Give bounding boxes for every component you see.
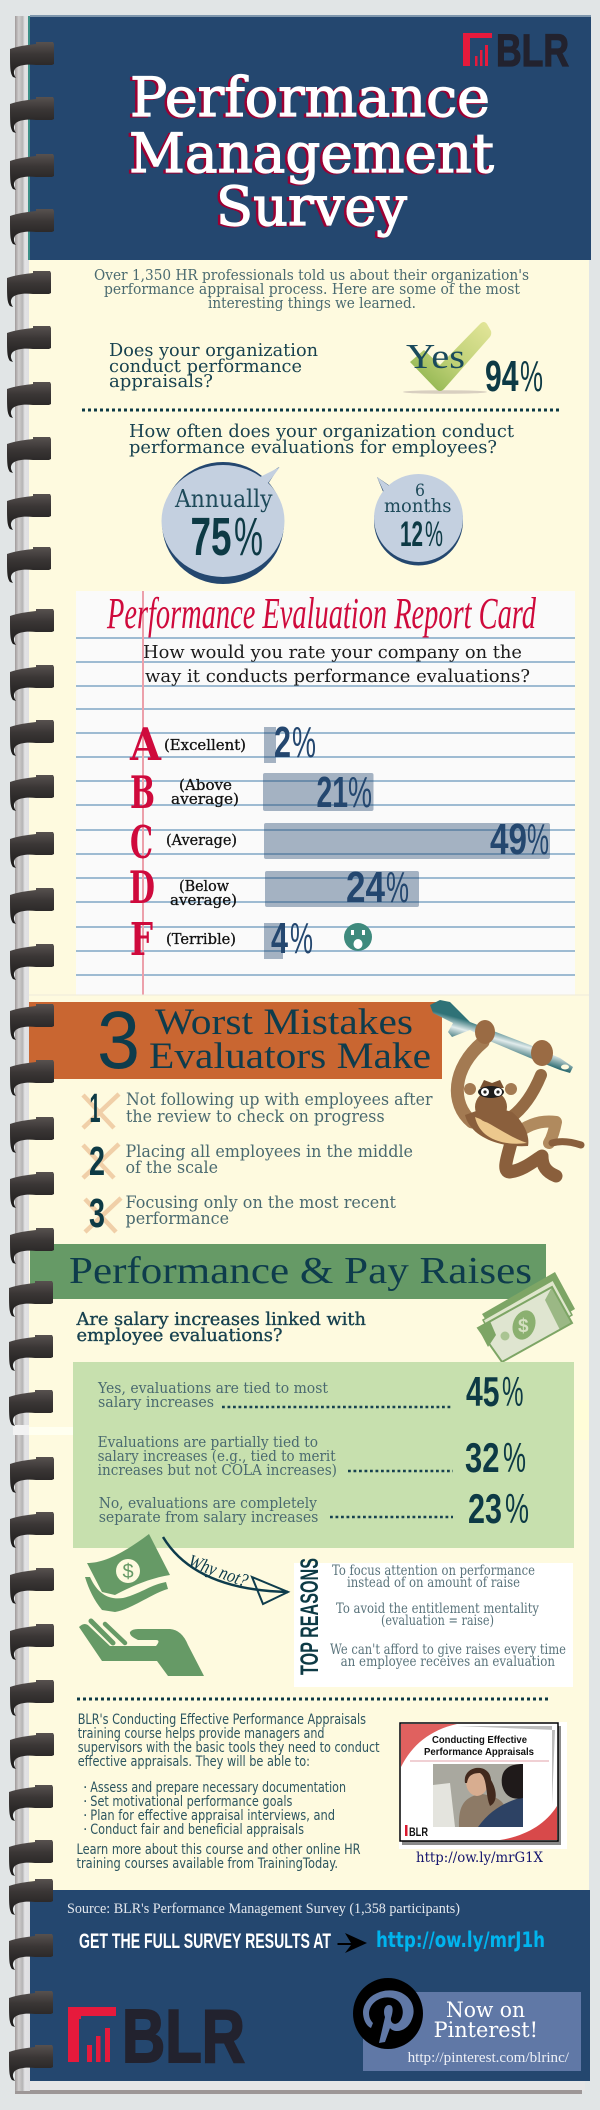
result: 45%: salary increases (98, 1393, 214, 1411)
source: Source: BLR's Performance Management Survey (1,358 participants) (67, 1901, 460, 1917)
speech bubble: 6 months 12%: 6 (415, 481, 425, 501)
banner: 3 worst mistakes: 3 (97, 995, 140, 1086)
answer: yes 94%: Yes (406, 337, 465, 376)
training course text: · (83, 1808, 87, 1824)
intro text: performance appraisal process. Here are some of the most (104, 280, 520, 298)
mistake list (83, 1085, 433, 1236)
dotted divider (82, 408, 559, 412)
card question (143, 642, 530, 687)
training course text: BLR's Conducting Effective Performance Appraisals (78, 1712, 366, 1728)
mistake 3: performance (126, 1209, 229, 1229)
mistake 1: Not following up with employees after (126, 1090, 433, 1110)
grade letters: D (129, 861, 155, 914)
card question: How would you rate your company on the (143, 642, 522, 663)
grade percentages: % (290, 914, 313, 963)
panel: report card (76, 589, 575, 995)
training course text: Conduct fair and beneficial appraisals (90, 1822, 304, 1838)
banner: performance and pay raises: Performance & Pay Raises (69, 1250, 532, 1292)
icon: money over hand (79, 1534, 204, 1676)
survey url: http://ow.ly/mrJ1h (376, 1928, 545, 1952)
training course text: effective appraisals. They will be able to: (78, 1754, 310, 1770)
pinterest badge: http://pinterest.com/blrinc/ (408, 2050, 570, 2066)
icon: check mark (403, 322, 491, 394)
question: how often: How often does your organization conduct (129, 421, 515, 442)
title: Management (129, 122, 494, 185)
question: conduct appraisals: conduct performance (109, 356, 302, 377)
title: Survey (216, 175, 407, 238)
result: 23%: % (505, 1485, 529, 1532)
grade percentages: 4 (271, 914, 288, 963)
question: conduct appraisals: appraisals? (109, 371, 213, 392)
arrow (338, 1933, 367, 1953)
grade labels: (Above (179, 778, 232, 794)
arrow: why not: Why not? (185, 1551, 251, 1592)
result: 23%: No, evaluations are completely (99, 1494, 317, 1512)
result: 32%: Evaluations are partially tied to (98, 1433, 318, 1451)
grade percentages: % (292, 718, 316, 767)
question: salary increases: employee evaluations? (76, 1325, 282, 1346)
grade percentages: % (348, 768, 372, 817)
answer: yes 94% (406, 337, 543, 401)
icon: shocked face (344, 923, 372, 951)
question: conduct appraisals: Does your organization (109, 340, 318, 361)
result: 23%: 23 (468, 1485, 502, 1532)
result: 32%: 32 (465, 1434, 500, 1481)
result: 32%: increases but not COLA increases) (98, 1461, 337, 1479)
training course text: Learn more about this course and other online HR (76, 1842, 361, 1858)
question: conduct appraisals (109, 340, 318, 392)
intro text: interesting things we learned. (208, 294, 416, 312)
pinterest badge: Now on (446, 1998, 525, 2022)
page fold glitch (29, 1400, 589, 1440)
call to action: GET THE FULL SURVEY RESULTS AT (79, 1930, 331, 1953)
icon: money over hand: $ (122, 1561, 134, 1583)
grade labels: (Excellent) (164, 738, 246, 754)
illustration: monkey with wrench (430, 1000, 581, 1176)
logo: BLR bottom (68, 1994, 245, 2078)
mistake 1 (83, 1085, 433, 1131)
intro text (94, 266, 529, 312)
reasons: We can't afford to give raises every time (330, 1642, 566, 1658)
mistake 2 (83, 1138, 413, 1184)
grade labels (164, 738, 246, 948)
icon: stack of dollar bills: $ (518, 1316, 529, 1337)
training course text: supervisors with the basic tools they need to conduct (78, 1740, 380, 1756)
grade labels: (Below (179, 879, 230, 895)
divider (29, 994, 589, 996)
training course text: Plan for effective appraisal interviews, and (90, 1808, 335, 1824)
reasons: To focus attention on performance (332, 1563, 535, 1579)
result: 45%: Yes, evaluations are tied to most (97, 1379, 328, 1397)
speech bubble: annually 75%: % (234, 507, 263, 567)
mistake 2: Placing all employees in the middle (126, 1142, 413, 1162)
reasons: instead of on amount of raise (347, 1575, 520, 1591)
title: Management (126, 123, 492, 186)
logo: BLR top: BLR (496, 25, 569, 76)
grade letters (129, 718, 162, 966)
banner: performance and pay raises (30, 1244, 546, 1299)
grade percentages: % (386, 863, 409, 912)
training course text: Set motivational performance goals (90, 1794, 292, 1810)
grade letters: F (130, 913, 153, 966)
grade percentages: 21 (316, 768, 348, 817)
grade letters: A (129, 718, 162, 771)
speech bubble: annually 75%: 75 (190, 507, 232, 567)
course thumbnail: BLR (409, 1825, 428, 1839)
mistake 3: Focusing only on the most recent (126, 1193, 396, 1213)
speech bubble: annually 75% (162, 462, 284, 584)
reasons: (evaluation = raise) (381, 1613, 494, 1629)
title: Performance (128, 67, 488, 130)
grade percentages: % (527, 815, 549, 864)
speech bubble: 6 months 12% (374, 474, 463, 566)
grade labels: average) (170, 893, 237, 909)
training course text: · (83, 1780, 87, 1796)
course thumbnail: Performance Appraisals (424, 1746, 534, 1758)
question: salary increases: Are salary increases linked with (76, 1309, 366, 1330)
course thumbnail: Conducting Effective (432, 1734, 527, 1746)
banner: 3 worst mistakes: Worst Mistakes (155, 1002, 413, 1043)
logo: BLR bottom: BLR (122, 1994, 245, 2078)
grade labels: (Terrible) (166, 932, 236, 948)
mistake 2: 2 (89, 1138, 105, 1184)
result: 45%: 45 (466, 1368, 500, 1415)
result: 32%: salary increases (e.g., tied to merit (98, 1447, 336, 1465)
dotted divider (77, 1698, 548, 1700)
panel: salary link results (73, 1362, 574, 1548)
speech bubble: 6 months 12%: % (425, 515, 443, 554)
result: 32%: % (503, 1434, 526, 1481)
banner: 3 worst mistakes (29, 995, 442, 1086)
mistake 1: the review to check on progress (126, 1107, 385, 1127)
photo (433, 1764, 523, 1827)
mistake 1: 1 (90, 1085, 100, 1131)
training course text (76, 1712, 380, 1872)
intro text: Over 1,350 HR professionals told us about their organization's (94, 266, 529, 284)
mistake 3 (85, 1190, 396, 1236)
footer panel (30, 1890, 590, 2081)
reasons (330, 1563, 566, 1670)
arrow: why not (163, 1537, 288, 1604)
question: how often (129, 421, 515, 458)
training course text: · (83, 1822, 87, 1838)
banner: 3 worst mistakes: Evaluators Make (149, 1036, 431, 1077)
result: 45% (97, 1368, 524, 1415)
grade labels: average) (171, 792, 239, 808)
grade percentages: 24 (346, 863, 385, 912)
result: 23% (99, 1485, 529, 1532)
pinterest badge: Pinterest! (434, 2018, 538, 2042)
cream notebook page (29, 260, 589, 1892)
training course text: Assess and prepare necessary documentation (90, 1780, 346, 1796)
header panel (28, 15, 591, 260)
grade percentages: 2 (274, 718, 291, 767)
result: 45%: % (502, 1368, 524, 1415)
grade letters: C (130, 816, 153, 869)
course url: http://ow.ly/mrG1X (416, 1850, 543, 1866)
speech bubble: 6 months 12%: months (384, 495, 452, 517)
grade percentages: 49 (490, 815, 527, 864)
title: Survey (214, 176, 405, 239)
course thumbnail (399, 1722, 567, 1849)
grade bars (263, 727, 550, 959)
mistake 3: 3 (89, 1190, 105, 1236)
training course text: · (83, 1794, 87, 1810)
vertical heading: TOP REASONS (296, 1558, 324, 1675)
mistake 2: of the scale (126, 1158, 218, 1178)
grade labels: (Average) (166, 833, 237, 849)
speech bubble: annually 75%: Annually (174, 485, 273, 513)
question: how often: performance evaluations for employees? (129, 437, 497, 458)
reasons: an employee receives an evaluation (341, 1654, 555, 1670)
answer: yes 94%: 94 (485, 352, 519, 401)
training course text: training courses available from TrainingToday. (76, 1856, 338, 1872)
panel: top reasons (294, 1558, 573, 1687)
result: 23%: separate from salary increases (99, 1508, 318, 1526)
answer: yes 94%: % (520, 352, 543, 401)
lined paper (76, 591, 575, 995)
result: 32% (98, 1433, 526, 1481)
speech bubble: 6 months 12%: 12 (400, 515, 423, 554)
question: salary increases (76, 1309, 366, 1346)
grade percentages (271, 718, 549, 963)
monkey hands (475, 1020, 495, 1044)
monkey limbs and body (457, 1042, 581, 1176)
title: Performance (130, 66, 490, 129)
icon: stack of dollar bills (478, 1272, 575, 1362)
wrench (430, 1000, 573, 1073)
pinterest badge (353, 1978, 581, 2071)
training course text: training course helps provide managers and (78, 1726, 324, 1742)
spiral binding (7, 42, 54, 2081)
logo: BLR top (463, 25, 569, 76)
reasons: To avoid the entitlement mentality (336, 1601, 539, 1617)
card question: way it conducts performance evaluations? (145, 666, 530, 687)
title (126, 66, 494, 239)
grade letters: B (130, 766, 155, 819)
